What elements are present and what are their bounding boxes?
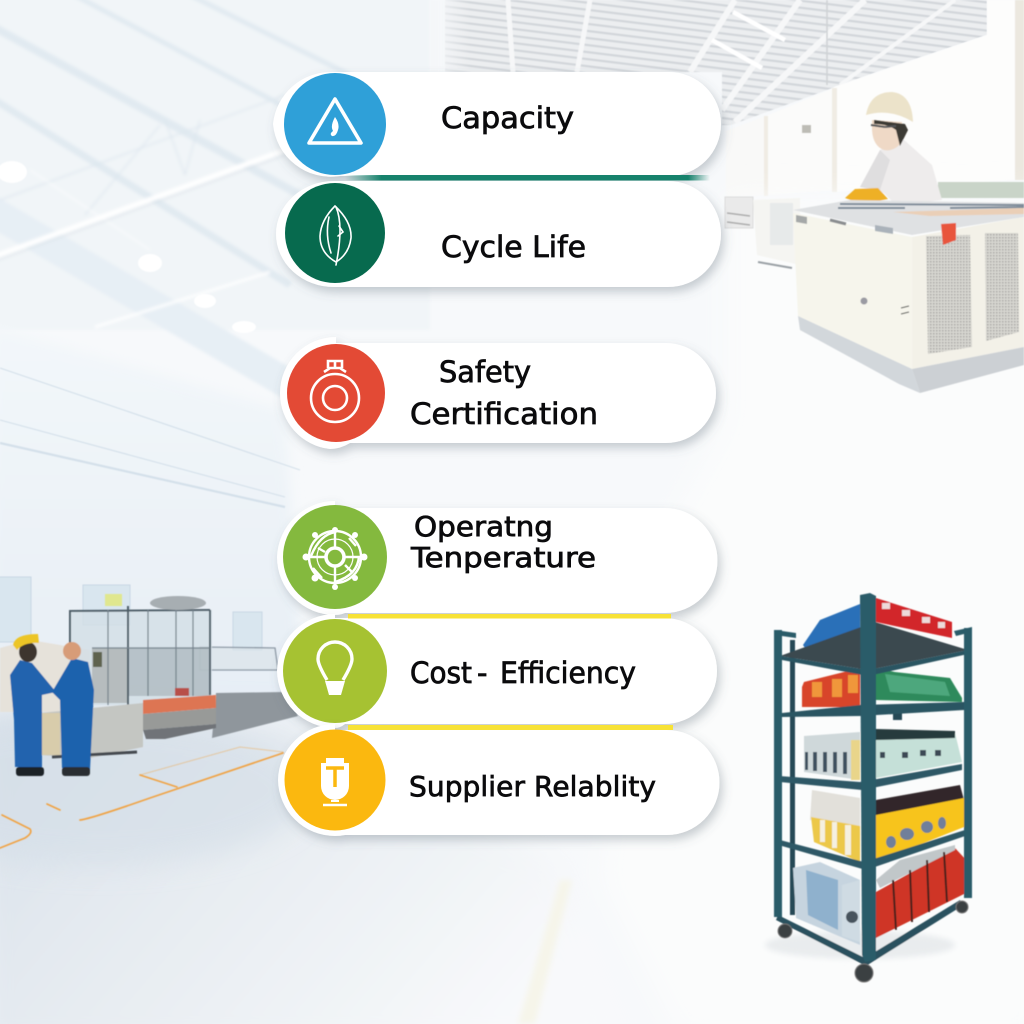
casters [778,901,968,982]
shelves [776,622,968,966]
label: Certification [410,397,598,431]
top right ceiling [430,0,987,125]
pill background [276,181,721,287]
pill background [277,501,718,615]
icon: warning triangle with flame [284,73,386,175]
label: Safety [439,355,531,389]
goods level 3 [804,729,962,780]
icon: leaf [285,183,385,283]
label: Cost [410,656,472,690]
goods level 1 [803,598,952,648]
label: Tenperature [410,541,596,574]
metal base [40,703,143,758]
right floor [600,195,1024,1024]
card: Operating Temperature [277,501,718,615]
pill background [277,614,717,728]
icon: plug on stand [284,730,386,830]
icon: round seal [287,344,385,442]
orange floor markings [0,747,283,848]
divider: teal line [345,175,710,180]
rail [200,647,278,670]
label: Efficiency [500,656,636,690]
glass machine [69,596,212,705]
card: Cycle Life [276,181,721,287]
top right walls [726,0,1024,197]
label: Operatng [414,510,553,543]
photo: machine and two workers [0,596,283,848]
ceiling lights [0,161,256,333]
label: - [477,656,487,690]
left ceiling with trusses [0,0,430,385]
divider: yellow line [348,614,671,618]
left wall [0,325,305,720]
label [410,656,636,690]
card: Capacity [273,72,721,177]
label [410,355,598,431]
worker left [10,634,56,776]
pill background [278,724,720,836]
icon: network ring [283,505,387,609]
pill background [273,72,721,177]
label: Supplier Relablity [409,770,656,803]
photo: worker with helmet at cooling unit [725,92,1024,393]
icon: light bulb [283,619,387,723]
sacks [0,640,90,712]
red base [143,695,216,739]
divider: yellow line [348,725,673,730]
worker [845,92,942,205]
goods level 2 [802,668,962,707]
pill background [280,337,716,449]
photo: shelving cart with packaged goods [765,593,972,982]
card: Cost-Efficiency [277,614,717,728]
label: Capacity [441,101,574,135]
label [410,510,596,574]
cooling unit [793,200,1024,393]
frame posts [774,593,972,962]
label: Cycle Life [441,230,586,264]
card: Supplier Reliability [278,724,720,836]
background units [725,182,1024,268]
worker right [52,642,94,776]
floor [0,705,640,1024]
windows [0,577,262,650]
card: Safety Certification [280,337,716,449]
back posts [790,640,902,915]
goods level 4 [810,785,964,862]
goods level 5 [793,845,968,945]
